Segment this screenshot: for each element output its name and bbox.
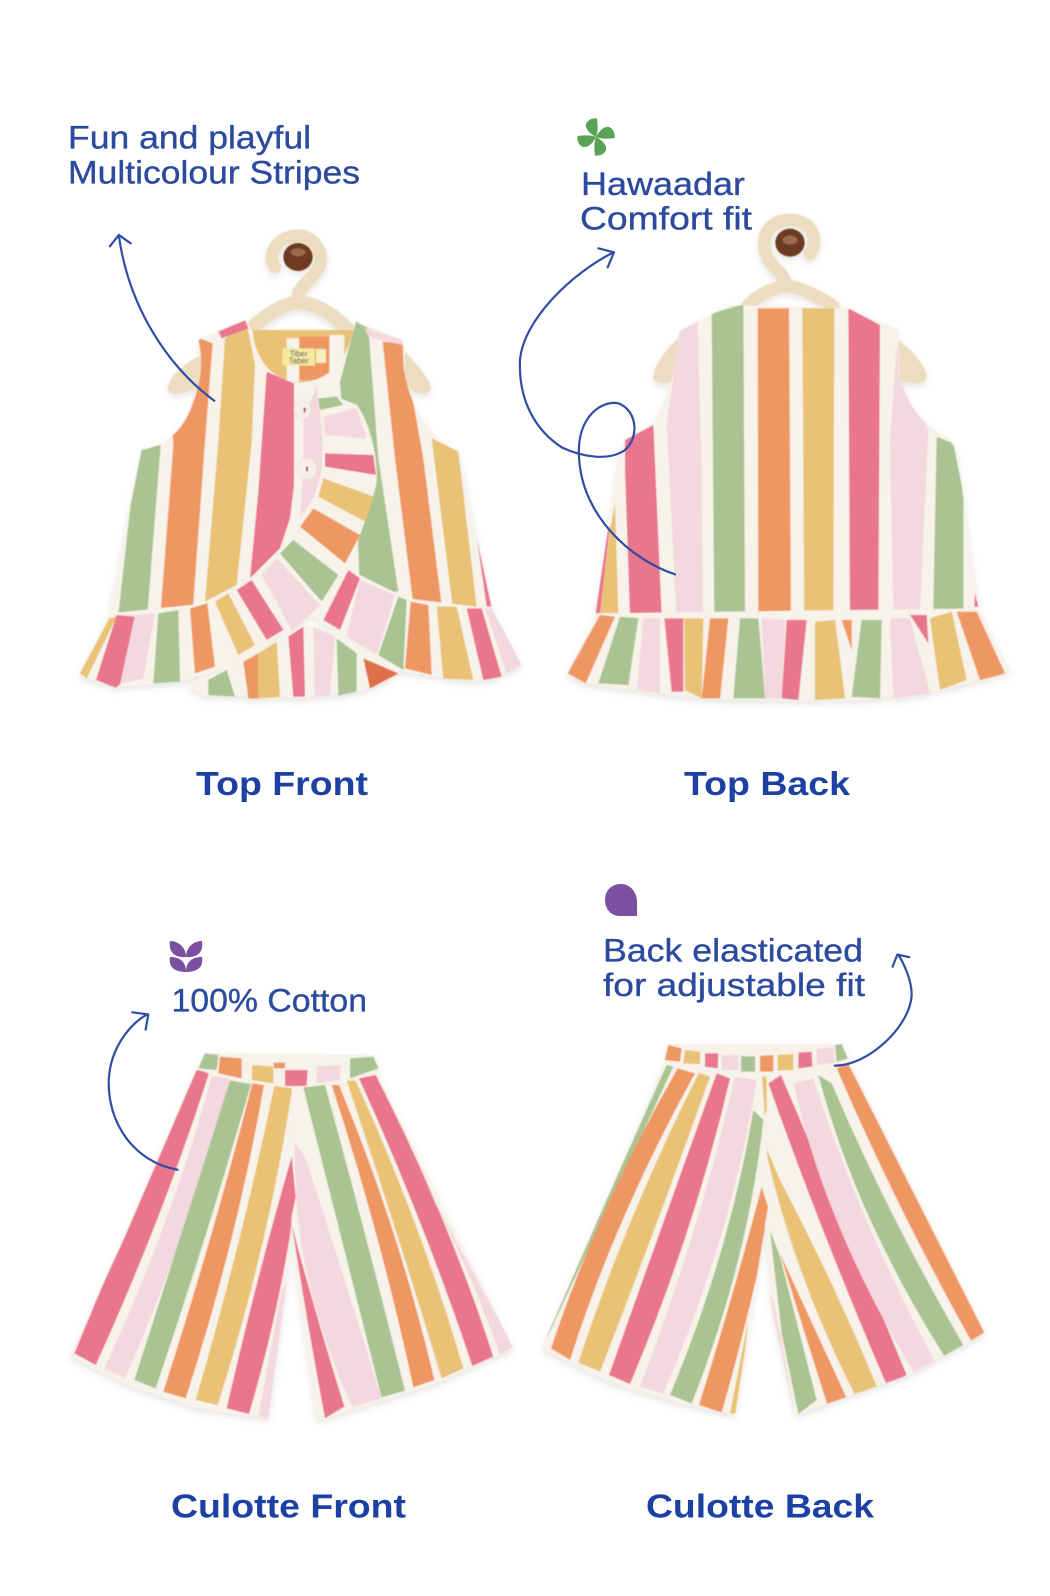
buttons [294,401,317,480]
text: elastic callout [603,932,865,1003]
text: comfort fit callout: Comfort fit [580,200,752,236]
panel: culotte back [535,884,988,1524]
heading: culotte back: Culotte Back [646,1488,875,1524]
left leg [65,1067,298,1423]
left leg [535,1057,775,1420]
waistband [198,1053,378,1087]
peplum [567,608,1010,700]
text: elastic callout: for adjustable fit [603,967,865,1003]
panel: culotte front [65,941,518,1524]
icon: purple leaves [170,941,202,972]
text: comfort fit callout [580,166,752,236]
inner back neckline with label: Tiber [290,349,308,358]
inner back neckline with label [253,330,353,383]
arrow: stripes callout [110,235,214,401]
elastic waistband [665,1044,848,1072]
right leg [758,1057,988,1420]
culotte front garment [65,1053,518,1423]
panel: top front [68,120,522,802]
top front garment on hanger [80,236,522,698]
text: cotton callout: 100% Cotton [172,982,367,1018]
heading: culotte front: Culotte Front [171,1488,406,1524]
hanger [168,236,431,394]
text: stripes callout: Fun and playful [68,120,311,156]
body stripes [592,300,985,623]
text: stripes callout: Multicolour Stripes [68,154,360,190]
body stripes [103,315,497,618]
culotte back garment [535,1044,988,1420]
arrow: comfort fit callout [520,248,675,574]
icon: green pinwheel [577,118,615,156]
heading: top back: Top Back [684,765,851,802]
panel: top back [520,118,1010,802]
text: comfort fit callout: Hawaadar [581,166,745,202]
right leg [288,1067,518,1423]
icon: purple drop [605,884,637,916]
inner back neckline with label: Taber [289,357,309,366]
left peplum [80,578,283,688]
text: stripes callout [68,120,360,190]
front ruffle [257,397,377,633]
arrow: elastic callout [835,955,912,1066]
hanger [653,220,927,383]
text: elastic callout: Back elasticated [603,932,863,968]
heading: top front: Top Front [196,765,368,802]
right peplum [317,568,522,682]
bottom underskirt [185,625,400,698]
top back garment on hanger [567,220,1010,700]
arrow: cotton callout [109,1012,177,1170]
